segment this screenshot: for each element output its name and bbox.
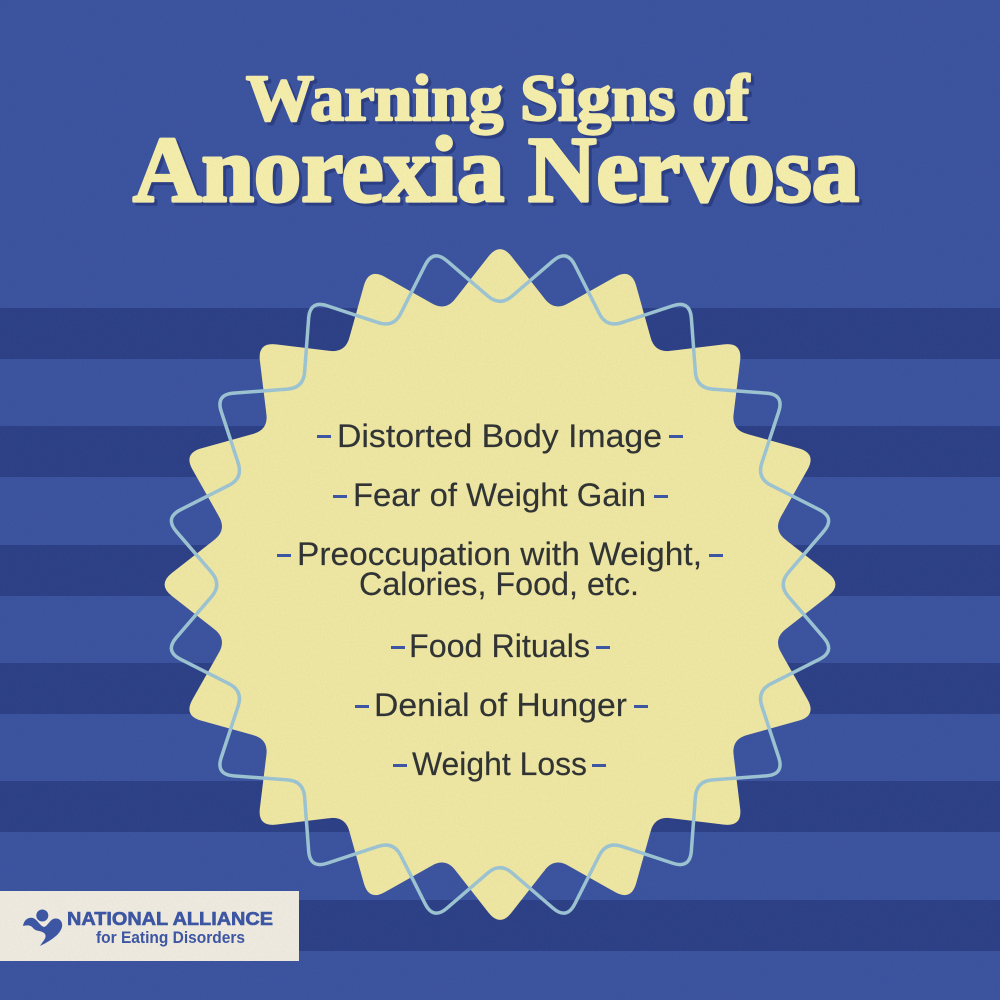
starburst badge xyxy=(105,190,895,979)
sign: distorted body image: Distorted Body Image xyxy=(337,418,662,454)
logo icon: heart with figure xyxy=(23,910,62,946)
title line 1: Warning Signs of xyxy=(246,62,750,135)
sign: preoccupation xyxy=(277,536,723,602)
sign: weight loss: Weight Loss xyxy=(412,746,587,782)
title line 2: Anorexia Nervosa xyxy=(133,119,859,222)
sign: fear of weight gain: Fear of Weight Gain xyxy=(353,477,646,513)
title xyxy=(133,62,859,222)
sign: preoccupation: Preoccupation with Weight, xyxy=(297,536,702,572)
sign: denial of hunger: Denial of Hunger xyxy=(374,687,627,723)
logo tagline: for Eating Disorders xyxy=(96,928,245,947)
logo text: NATIONAL ALLIANCE xyxy=(67,909,273,929)
warning signs list xyxy=(277,418,723,782)
dark horizontal stripes xyxy=(0,308,1000,951)
logo panel xyxy=(0,891,299,961)
sign: preoccupation: Calories, Food, etc. xyxy=(359,566,639,602)
badge fill xyxy=(164,249,836,920)
badge outline rotated star xyxy=(105,190,895,979)
sign: food rituals: Food Rituals xyxy=(409,628,590,664)
